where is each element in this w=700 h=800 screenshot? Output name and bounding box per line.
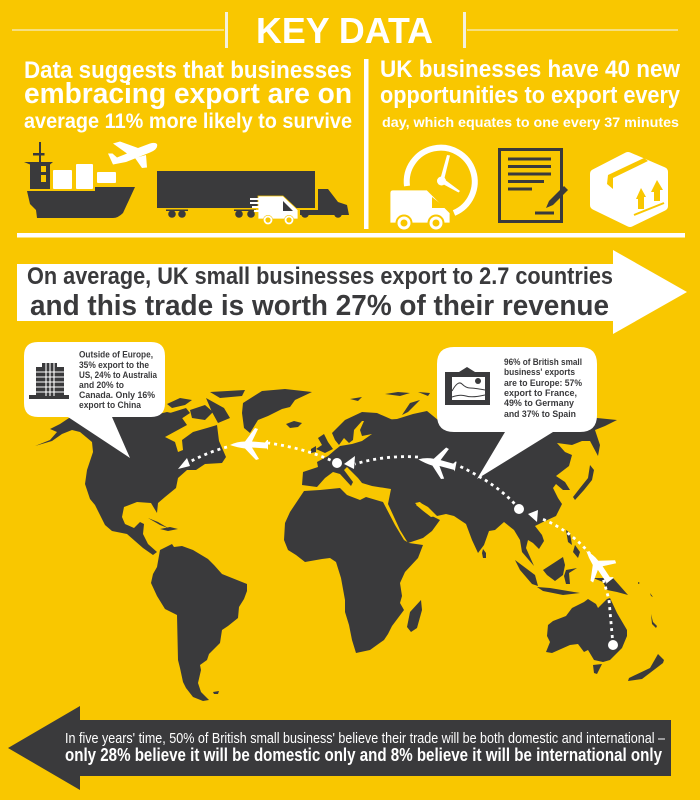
map: eurasia [302,411,617,566]
map: russian arctic islands [350,392,430,415]
map: tasmania [593,664,602,674]
icon: office building [29,363,69,399]
flight route: dotted lines and stops [178,443,618,650]
world map [35,389,664,701]
icon: plane over indonesia [574,541,623,590]
dark arrow banner [8,706,671,790]
icon: framed picture [445,367,490,405]
icon: cargo ship [24,142,135,218]
map: scandinavia [332,412,393,445]
map: britain and ireland [311,434,333,453]
callout: exports to europe [437,347,597,479]
text: outside europe statistics [79,350,158,410]
text block: survival statistic: average 11% more likely to survive [24,110,352,133]
map: pacific islands [638,582,657,628]
text: europe statistics: export to France, [504,388,577,398]
icon: parcel box [595,157,664,222]
map: greenland [242,389,312,433]
text block: export opportunities statistic: UK businesses have 40 new [380,56,680,83]
white arrow banner: and this trade is worth 27% of their revenue [30,290,609,322]
icon: plane over asia [415,443,459,481]
text block: survival statistic: embracing export are on [24,78,352,110]
map: sri lanka [482,549,486,558]
icon: lorry [157,171,349,218]
map: new zealand [628,654,664,681]
text: europe statistics: and 37% to Spain [504,409,576,419]
map: south america [151,544,247,701]
white arrow banner: On average, UK small businesses export to 2.7 countries [27,263,613,290]
text: outside europe statistics: Outside of Europe, [79,350,153,360]
map: southeast asia islands [515,530,628,595]
map: madagascar [407,600,422,632]
text: europe statistics: business' exports [504,367,575,377]
text: europe statistics: are to Europe: 57% [504,378,583,388]
map: arctic islands [167,390,245,423]
icon: clock and van [390,148,475,232]
text: outside europe statistics: and 20% to [79,380,124,390]
dividers [17,59,685,238]
text: europe statistics: 96% of British small [504,357,582,367]
map: north america [35,412,226,555]
text block: export opportunities statistic: day, which equates to one every 37 minutes [382,114,679,130]
callout: outside europe [24,342,165,458]
text: outside europe statistics: 35% export to the [79,360,149,370]
title: key data: KEY DATA [256,10,433,51]
text block: survival statistic [24,57,352,133]
map: persian gulf water [415,502,437,517]
text: europe statistics: 49% to Germany [504,398,575,408]
icon: cargo plane [108,142,157,168]
map: falkland islands [213,691,219,694]
text: outside europe statistics: Canada. Only 16% [79,390,156,400]
text: europe statistics [504,357,583,419]
map: africa [284,488,423,653]
text block: export opportunities statistic [380,56,681,130]
title: key data [12,10,678,51]
map: australia [546,598,627,662]
text: outside europe statistics: US, 24% to Australia [79,370,158,380]
icon: signed document [500,150,568,222]
icon: plane over atlantic [230,428,268,460]
map: japan [573,465,594,500]
icon: fast white van [250,196,298,225]
map: caribbean [148,518,178,531]
text: outside europe statistics: export to China [79,400,142,410]
text block: survival statistic: Data suggests that businesses [24,57,352,84]
map: iceland [286,421,302,428]
white arrow banner [17,250,687,334]
